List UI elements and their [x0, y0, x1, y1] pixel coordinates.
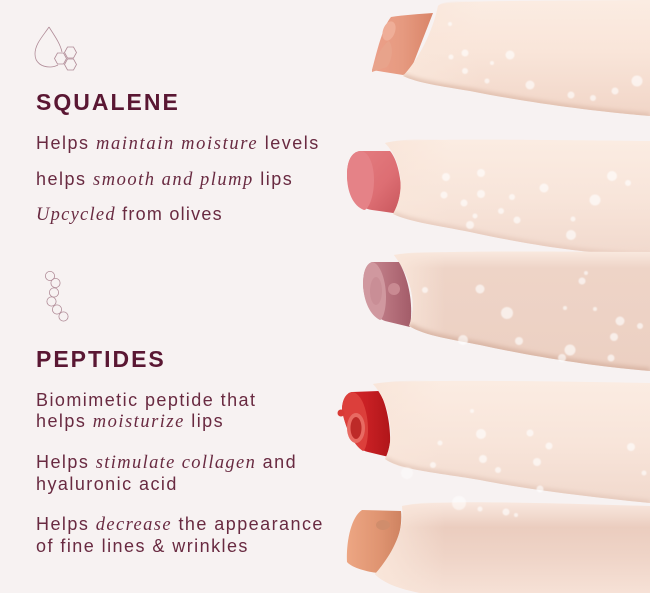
text: peptides benefit 1: helps moisturize lips [36, 411, 224, 432]
tube 4 [338, 381, 650, 503]
text: peptides benefit 3: Helps decrease the appearance [36, 514, 324, 535]
tube 1 [372, 0, 650, 116]
tube 5 [347, 502, 650, 593]
text: peptides benefit 2: hyaluronic acid [36, 474, 178, 494]
text: peptides benefit 2: Helps stimulate collagen and [36, 452, 297, 473]
text: squalene benefit 3: Upcycled from olives [36, 204, 223, 225]
text: peptides benefit 1 [36, 390, 256, 432]
text: squalene benefit 1: Helps maintain moisture levels [36, 133, 320, 154]
text: peptides benefit 2 [36, 452, 297, 494]
text: peptides benefit 3: of fine lines & wrinkles [36, 536, 249, 556]
text: peptides benefit 3 [36, 514, 324, 556]
heading: peptides: PEPTIDES [36, 346, 166, 372]
tube 2 [347, 139, 650, 256]
water droplets [401, 22, 646, 517]
text: squalene benefit 2: helps smooth and plump lips [36, 169, 293, 190]
illustration: lip balm tubes with water droplets [338, 0, 650, 593]
text: peptides benefit 1: Biomimetic peptide that [36, 390, 256, 410]
heading: squalene: SQUALENE [36, 89, 180, 115]
tube 3 [363, 251, 650, 371]
